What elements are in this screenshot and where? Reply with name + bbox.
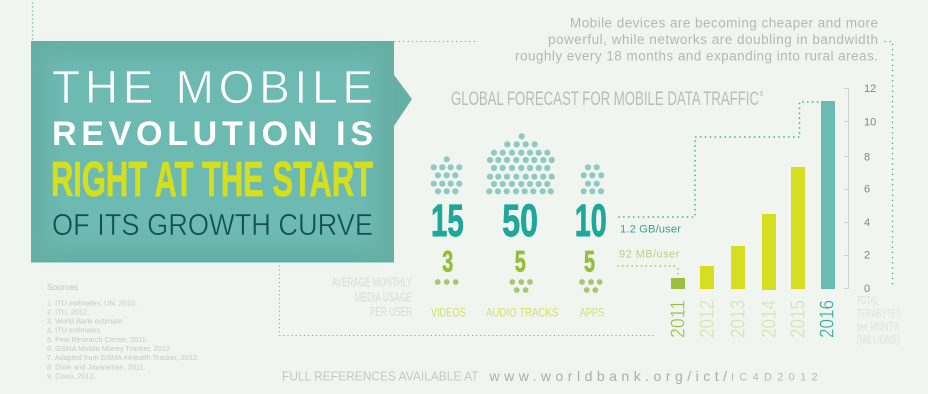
bar 2015 xyxy=(791,167,805,289)
title line 1: THE MOBILE xyxy=(52,61,373,113)
sources heading: Sources xyxy=(47,282,78,292)
large teal usage numbers: 50 xyxy=(502,195,538,246)
dotted connector lines xyxy=(32,3,892,336)
year labels: 2012 xyxy=(696,300,718,338)
label: average monthly media usage xyxy=(332,276,412,319)
media category labels xyxy=(431,306,604,320)
intro text block: roughly every 18 months and expanding into rural areas. xyxy=(515,48,878,64)
sources list xyxy=(47,282,199,380)
footer label: FULL REFERENCES AVAILABLE AT xyxy=(282,369,479,384)
callout: 92 MB per user: 92 MB/user xyxy=(619,249,680,261)
chart axis xyxy=(844,83,876,295)
source entries xyxy=(47,298,199,380)
small green usage numbers: 3 xyxy=(442,246,453,278)
large teal usage numbers xyxy=(431,195,607,246)
axis unit label: TERABYTES xyxy=(857,308,901,320)
icon: 50 audio tracks dot cluster xyxy=(486,133,555,194)
icon: 10 apps dot cluster xyxy=(581,164,604,194)
banner inner glow xyxy=(48,58,376,246)
media category labels: AUDIO TRACKS xyxy=(486,306,558,320)
title line 3: RIGHT AT THE START xyxy=(51,153,373,207)
axis numbers: 2 xyxy=(864,250,870,262)
bar 2016 xyxy=(821,101,835,289)
small green usage numbers: 5 xyxy=(584,246,595,278)
intro text block: powerful, while networks are doubling in bandwidth xyxy=(548,32,878,47)
source entries: 8. Dixie and Jayaraman, 2011. xyxy=(47,362,145,371)
media category labels: VIDEOS xyxy=(431,306,466,320)
source entries: 4. ITU estimates. xyxy=(47,326,102,335)
large teal usage numbers: 15 xyxy=(431,195,464,246)
footer url suffix: IC4D2012 xyxy=(731,372,818,384)
axis numbers: 8 xyxy=(864,152,870,164)
large teal usage numbers: 10 xyxy=(575,195,607,246)
year labels: 2014 xyxy=(758,300,780,338)
small green usage numbers xyxy=(442,246,595,278)
chart heading: GLOBAL FORECAST FOR MOBILE DATA TRAFFIC xyxy=(451,89,759,110)
title line 2: REVOLUTION IS xyxy=(52,115,373,153)
bar 2011 xyxy=(671,278,685,289)
year labels: 2011 xyxy=(668,300,690,338)
bar chart: mobile data traffic xyxy=(671,101,835,290)
label: average monthly media usage: AVERAGE MONTHLY xyxy=(332,276,412,290)
intro text block: Mobile devices are becoming cheaper and more xyxy=(570,16,878,30)
intro text block xyxy=(515,16,878,64)
banner shape xyxy=(31,41,412,262)
axis numbers: 6 xyxy=(864,184,870,196)
banner bottom edge xyxy=(31,262,394,263)
callout: 1.2 GB per user: 1.2 GB/user xyxy=(620,224,681,236)
source entries: 6. GSMA Mobile Money Tracker, 2012. xyxy=(47,344,172,353)
media category labels: APPS xyxy=(580,306,604,320)
icon: 15 videos dot cluster xyxy=(431,156,462,194)
bar 2014 xyxy=(762,214,776,290)
panel: title banner xyxy=(31,41,412,263)
axis numbers xyxy=(864,83,876,295)
year labels: 2015 xyxy=(788,300,810,338)
footer references xyxy=(282,368,818,384)
axis numbers: 12 xyxy=(864,83,876,95)
axis unit label xyxy=(857,296,901,346)
source entries: 7. Adapted from GSMA mHealth Tracker, 2012. xyxy=(47,353,199,362)
footer url: www.worldbank.org/ict/ xyxy=(488,368,727,384)
axis numbers: 0 xyxy=(864,283,870,295)
axis unit label: (MILLIONS) xyxy=(857,334,900,346)
year labels: 2016 xyxy=(816,300,838,338)
source entries: 1. ITU estimates; UN, 2010. xyxy=(47,298,137,307)
label: average monthly media usage: PER USER xyxy=(370,305,412,319)
bar 2012 xyxy=(700,266,714,289)
chart heading: 9 xyxy=(760,91,764,98)
title line 4: OF ITS GROWTH CURVE xyxy=(52,207,373,242)
bar 2013 xyxy=(731,246,745,289)
axis unit label: TOTAL xyxy=(857,296,879,308)
axis unit label: per MONTH xyxy=(857,322,899,334)
axis numbers: 10 xyxy=(864,116,876,128)
year labels xyxy=(668,300,838,338)
source entries: 3. World Bank estimate. xyxy=(47,316,124,326)
source entries: 5. Pew Research Center, 2011. xyxy=(47,335,148,344)
source entries: 9. Cisco, 2012. xyxy=(47,371,96,380)
icon: green usage dots xyxy=(435,279,603,293)
label: average monthly media usage: MEDIA USAGE xyxy=(355,290,412,304)
axis numbers: 4 xyxy=(864,217,870,229)
source entries: 2. ITU, 2012. xyxy=(47,307,89,316)
year labels: 2013 xyxy=(728,300,750,338)
small green usage numbers: 5 xyxy=(515,246,526,278)
